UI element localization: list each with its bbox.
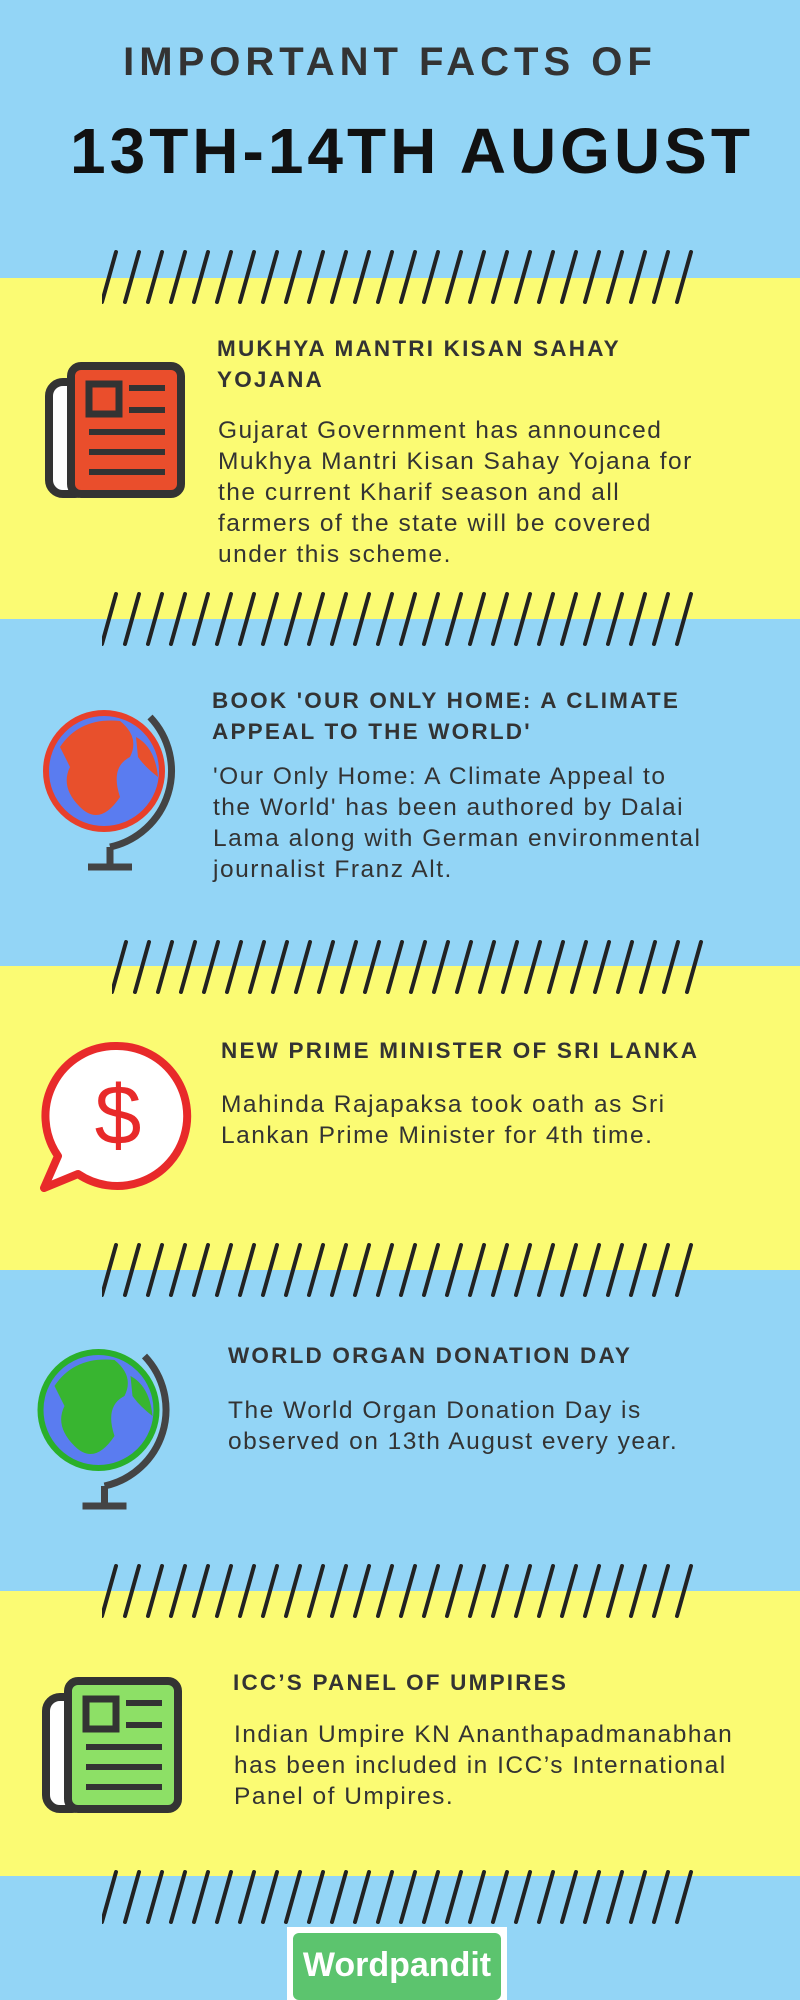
text: 'Our Only Home: A Climate Appeal to <box>213 763 666 790</box>
icon: newspaper green <box>42 1677 182 1813</box>
logo: wordpandit: Wordpandit <box>303 1946 491 1984</box>
heading <box>212 688 680 744</box>
text <box>221 1091 666 1149</box>
text: has been included in ICC’s International <box>234 1752 727 1779</box>
icon: newspaper red <box>45 362 185 498</box>
text <box>212 763 701 883</box>
icon: dollar speech bubble <box>40 1042 192 1192</box>
icon: dollar speech bubble: $ <box>95 1068 141 1162</box>
text: Lankan Prime Minister for 4th time. <box>221 1122 653 1149</box>
heading: WORLD ORGAN DONATION DAY <box>228 1343 632 1368</box>
text: farmers of the state will be covered <box>218 510 652 537</box>
title: 13TH-14TH AUGUST <box>70 115 754 187</box>
heading: MUKHYA MANTRI KISAN SAHAY <box>217 336 621 361</box>
heading: APPEAL TO THE WORLD' <box>212 719 532 744</box>
text: the current Kharif season and all <box>218 479 620 506</box>
text: Mahinda Rajapaksa took oath as Sri <box>221 1091 666 1118</box>
heading: NEW PRIME MINISTER OF SRI LANKA <box>221 1038 699 1063</box>
panel: section 2 <box>43 688 701 883</box>
text <box>228 1397 678 1455</box>
text: The World Organ Donation Day is <box>228 1397 642 1424</box>
text: journalist Franz Alt. <box>213 856 453 883</box>
text: under this scheme. <box>218 541 452 568</box>
text: Panel of Umpires. <box>234 1783 454 1810</box>
heading <box>217 336 621 392</box>
panel: section 5 <box>42 1670 733 1813</box>
icon: globe green <box>38 1349 170 1510</box>
text: Lama along with German environmental <box>213 825 701 852</box>
text <box>218 417 693 568</box>
icon: globe red <box>43 710 176 870</box>
text: the World' has been authored by Dalai <box>213 794 684 821</box>
text <box>234 1721 733 1810</box>
text: Gujarat Government has announced <box>218 417 662 444</box>
panel: section 3 <box>40 1038 699 1192</box>
panel: section 4 <box>38 1343 678 1510</box>
text: observed on 13th August every year. <box>228 1428 678 1455</box>
logo: wordpandit <box>287 1927 507 2000</box>
heading: BOOK 'OUR ONLY HOME: A CLIMATE <box>212 688 680 713</box>
heading: ICC’S PANEL OF UMPIRES <box>233 1670 568 1695</box>
title: IMPORTANT FACTS OF <box>123 40 657 84</box>
heading: YOJANA <box>217 367 324 392</box>
text: Mukhya Mantri Kisan Sahay Yojana for <box>218 448 693 475</box>
title <box>70 40 754 187</box>
text: Indian Umpire KN Ananthapadmanabhan <box>234 1721 733 1748</box>
panel: section 1 <box>45 336 693 568</box>
